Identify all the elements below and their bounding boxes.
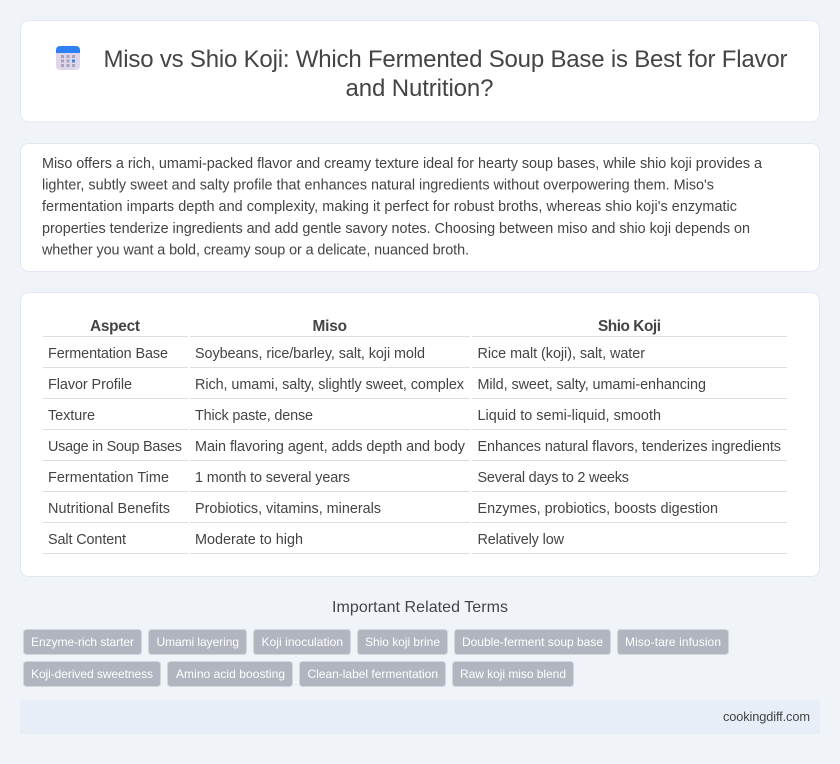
tag: enzyme-rich starter: Enzyme-rich starter [31,635,134,649]
tag: amino acid boosting [168,662,292,686]
tag: koji inoculation [254,630,350,654]
text block: introduction: lighter, subtly sweet and salty profile that enhances natural ingredients without overpowering them. Miso's [42,178,714,194]
text block: introduction: properties tenderize ingredients and add gentle savory notes. Choosing between miso and shio koji depends on [42,221,750,237]
panel: comparison table [20,292,820,576]
text block: introduction [41,156,762,258]
tag: koji-derived sweetness [24,662,160,686]
table row: salt content [43,532,787,554]
table row: nutritional benefits: Probiotics, vitamins, minerals [195,501,381,517]
text block: introduction: Miso offers a rich, umami-packed flavor and creamy texture ideal for hearty soup bases, while shio koji provides a [42,156,762,172]
tag: koji-derived sweetness: Koji-derived sweetness [31,667,153,681]
tag: umami layering: Umami layering [156,635,239,649]
table row: fermentation time: 1 month to several years [195,470,350,486]
table row: usage in soup bases [43,439,787,460]
table row: nutritional benefits: Nutritional Benefits [48,501,170,517]
tag: clean-label fermentation [300,662,446,686]
tag: enzyme-rich starter [24,630,142,654]
tag: umami layering [148,630,246,654]
tag: shio koji brine: Shio koji brine [365,635,440,649]
table row: fermentation base: Fermentation Base [48,346,168,362]
heading: important related terms: Important Related Terms [332,599,508,616]
table row: texture: Texture [48,408,95,424]
table row: flavor profile: Flavor Profile [48,377,132,393]
table row: salt content: Relatively low [478,532,565,548]
tag: shio koji brine [358,630,448,654]
tag: double-ferment soup base: Double-ferment soup base [462,635,603,649]
table row: salt content: Salt Content [48,532,126,548]
tag: miso-tare infusion [618,630,728,654]
footer [20,700,820,734]
table header row: Aspect [90,318,140,335]
text block: introduction: fermentation imparts depth and complexity, making it perfect for robust broths, whereas shio koji's enzymatic [42,199,737,215]
footer: cookingdiff.com [723,709,810,724]
table row: fermentation time: Fermentation Time [48,470,169,486]
table row: nutritional benefits: Enzymes, probiotics, boosts digestion [478,501,718,517]
table header row: Shio Koji [598,318,661,335]
text block: introduction: whether you want a bold, creamy soup or a delicate, nuanced broth. [41,242,469,258]
table row: flavor profile: Mild, sweet, salty, umami-enhancing [478,377,706,393]
panel: introduction [20,144,820,272]
table row: salt content: Moderate to high [195,532,303,548]
table row: flavor profile [43,377,787,398]
title: Miso vs Shio Koji: Which Fermented Soup Base is Best for Flavor [104,46,788,73]
panel: related term tags [24,630,728,686]
tag: koji inoculation: Koji inoculation [262,635,343,649]
table header row [43,318,787,336]
table row: usage in soup bases: Usage in Soup Bases [48,439,182,455]
table header row: Miso [312,318,347,335]
tag: amino acid boosting: Amino acid boosting [176,667,285,681]
tag: double-ferment soup base [454,630,610,654]
table row: flavor profile: Rich, umami, salty, slightly sweet, complex [195,377,465,393]
icon: calendar [56,46,80,70]
tag: miso-tare infusion: Miso-tare infusion [625,635,721,649]
table row: usage in soup bases: Enhances natural flavors, tenderizes ingredients [478,439,781,455]
table row: fermentation time: Several days to 2 weeks [478,470,629,486]
table row: usage in soup bases: Main flavoring agent, adds depth and body [195,439,466,455]
title [104,46,788,102]
table row: fermentation base [43,346,787,368]
table row: fermentation base: Rice malt (koji), salt, water [478,346,645,362]
tag: raw koji miso blend [452,662,574,686]
table row: fermentation base: Soybeans, rice/barley, salt, koji mold [195,346,425,362]
title: and Nutrition? [346,75,494,102]
table row: nutritional benefits [43,501,787,522]
panel: title header [20,20,820,122]
table row: fermentation time [43,470,787,492]
tag: clean-label fermentation: Clean-label fermentation [308,667,438,681]
tag: raw koji miso blend: Raw koji miso blend [460,667,566,681]
table row: texture: Liquid to semi-liquid, smooth [478,408,661,424]
table row: texture: Thick paste, dense [195,408,313,424]
table row: texture [43,408,787,430]
